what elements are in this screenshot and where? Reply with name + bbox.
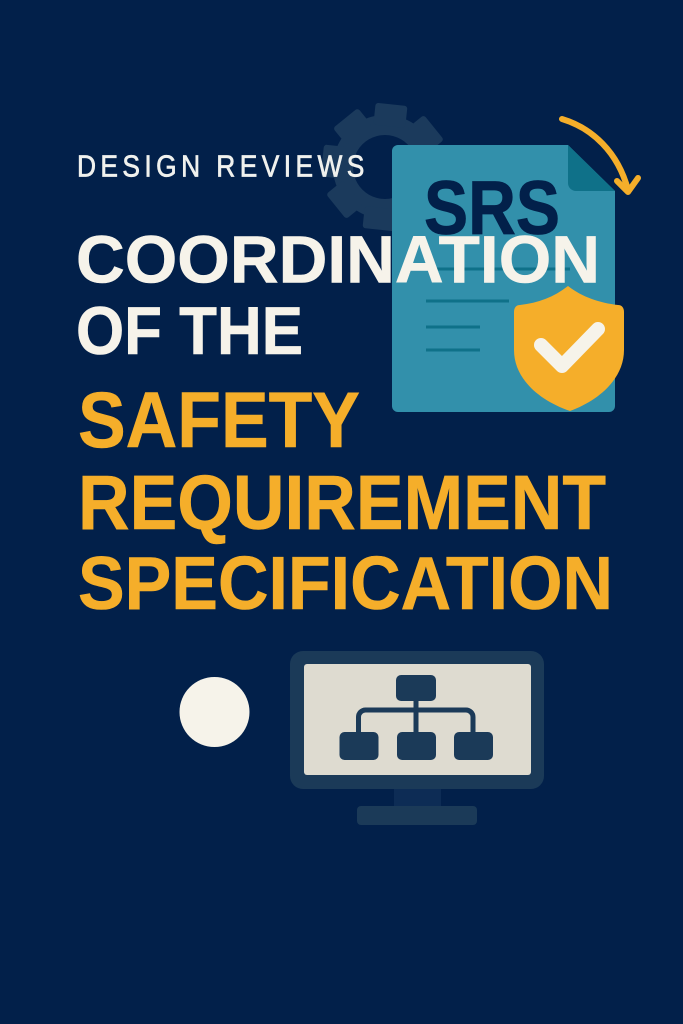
icon: monitor with hierarchy chart [290,651,544,825]
heading: yellow [78,375,613,625]
heading: white: OF THE [76,293,303,369]
heading: white [76,223,600,369]
arrow: curved yellow [562,119,638,192]
heading: white: COORDINATION [76,223,600,298]
icon: gear [316,98,454,236]
heading: yellow: SPECIFICATION [78,541,613,625]
icon: SRS document [392,145,615,412]
document label: SRS: SRS [424,166,560,251]
decorative circle [180,677,250,747]
subtitle: DESIGN REVIEWS [77,150,364,184]
heading: yellow: SAFETY [78,375,360,464]
heading: yellow: REQUIREMENT [78,460,606,546]
icon: shield with check [514,286,624,411]
hierarchy chart [340,675,493,760]
